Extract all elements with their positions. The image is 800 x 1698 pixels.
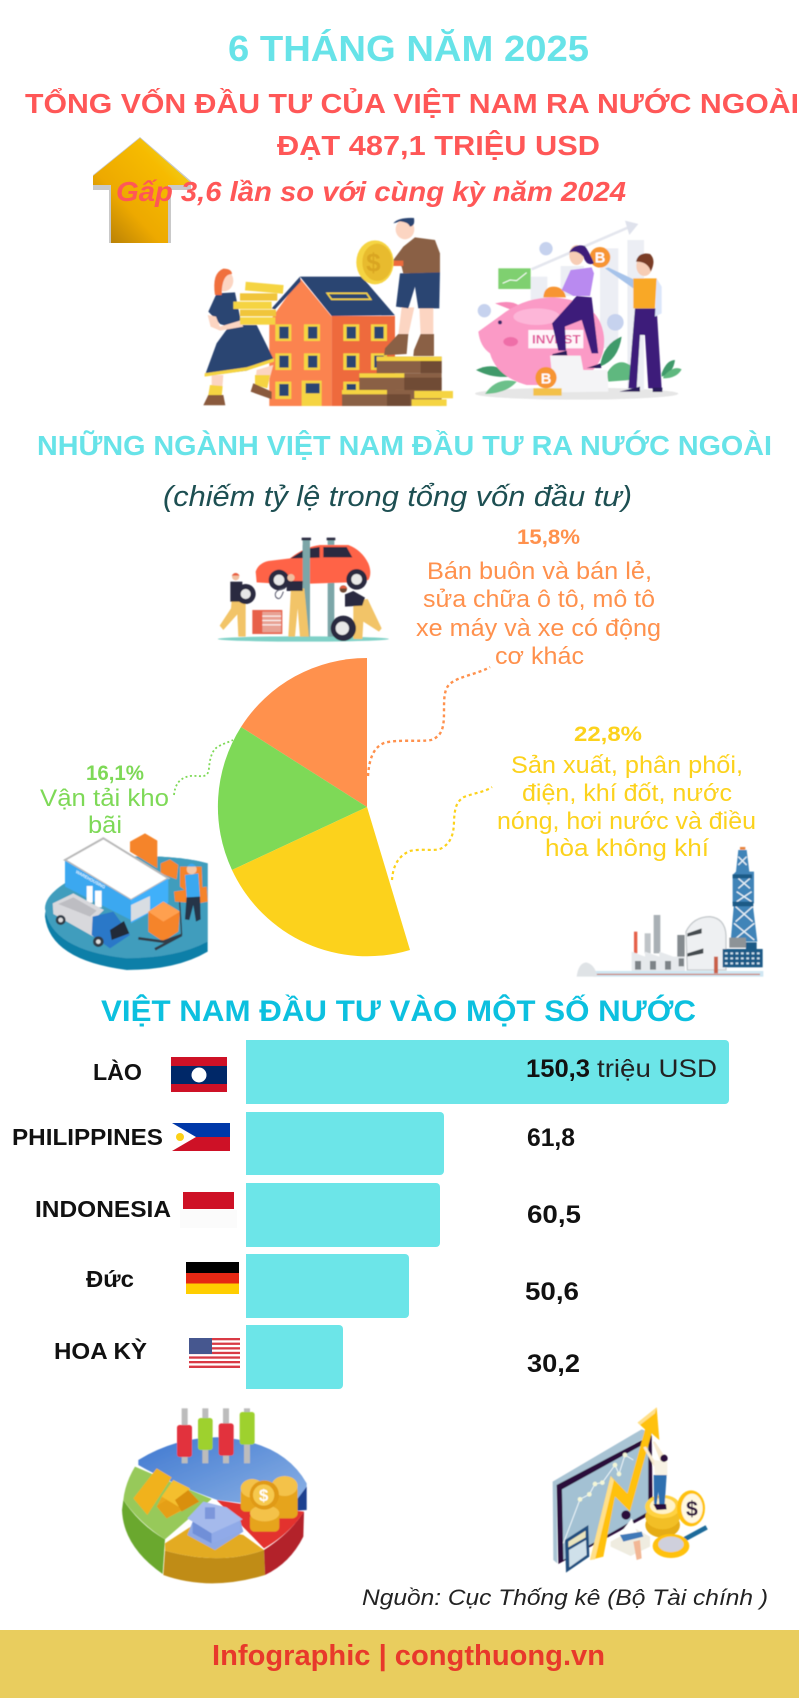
coins: B (595, 251, 605, 267)
car lift posts (302, 538, 335, 637)
magnifier (653, 1527, 707, 1558)
country labels: INDONESIA (35, 1196, 171, 1222)
label: energy sector: điện, khí đốt, nước (522, 780, 732, 807)
headline: total investment (25, 87, 799, 161)
coin stacks (241, 1476, 298, 1532)
truck (53, 893, 130, 948)
red car (256, 545, 370, 590)
bar: United States (246, 1325, 343, 1389)
man holding coin: $ (366, 248, 381, 278)
standing man (643, 1442, 668, 1510)
illustration: car repair (218, 538, 389, 642)
man holding coin (356, 218, 440, 356)
papers and seated woman (611, 1510, 650, 1560)
label: wholesale and retail: xe máy và xe có động (416, 615, 661, 642)
label: wholesale and retail: 15,8% (517, 526, 580, 549)
boxes behind (130, 833, 178, 879)
illustration: warehouse (45, 833, 208, 970)
pig (478, 297, 604, 385)
bar: Philippines (246, 1112, 444, 1175)
country labels: HOA KỲ (54, 1337, 147, 1364)
section heading: sectors: NHỮNG NGÀNH VIỆT NAM ĐẦU TƯ RA NƯỚC NGOÀI (37, 430, 772, 461)
woman carrying coins (203, 269, 284, 405)
label: transport and warehousing: bãi (88, 812, 122, 839)
coins: $ (686, 1497, 698, 1521)
illustration: monitor, rising arrow and coins (553, 1407, 707, 1573)
pig: INVEST (532, 332, 581, 346)
storage tank (686, 917, 726, 973)
yellow slice (163, 1525, 265, 1583)
label: wholesale and retail: Bán buôn và bán lẻ, (427, 558, 652, 585)
worker middle (275, 574, 309, 637)
steps of coins (342, 357, 453, 406)
illustration: oil rig and factory (577, 847, 763, 977)
woman (552, 245, 601, 368)
dotted connector: orange (368, 667, 490, 776)
headline: total investment: TỔNG VỐN ĐẦU TƯ CỦA VIỆT NAM RA NƯỚC NGOÀI (25, 87, 799, 119)
bar: Indonesia (246, 1183, 440, 1247)
factory (632, 915, 685, 971)
dome tank (577, 962, 597, 977)
illustration: piggy bank invest: B (541, 371, 551, 387)
bar: Germany (246, 1254, 409, 1318)
building: WAREHOUSING (75, 869, 107, 890)
calculator (565, 1525, 589, 1573)
bar chart: investment by country (246, 1040, 729, 1389)
green slice (122, 1467, 212, 1574)
flag: United States (189, 1338, 240, 1368)
label: transport and warehousing: 16,1% (86, 762, 144, 785)
subheadline: comparison with 2024: Gấp 3,6 lần so với cùng kỳ năm 2024 (116, 176, 626, 207)
label: energy sector (497, 723, 756, 862)
values: other countries: 50,6 (525, 1278, 579, 1306)
value: Laos (526, 1055, 717, 1083)
coin stacks: $ (259, 1486, 269, 1505)
worker left (220, 573, 256, 637)
flag: Germany (186, 1262, 239, 1294)
section heading: countries: VIỆT NAM ĐẦU TƯ VÀO MỘT SỐ NƯỚC (101, 994, 696, 1028)
section subtitle: (chiếm tỷ lệ trong tổng vốn đầu tư) (163, 481, 632, 513)
country labels: PHILIPPINES (12, 1124, 163, 1150)
platform (45, 856, 208, 970)
value: Laos: 150,3 (526, 1055, 590, 1083)
pedestal (550, 356, 608, 392)
footer text: Infographic | congthuong.vn (212, 1640, 605, 1672)
plants (476, 337, 682, 394)
label: transport and warehousing (40, 762, 169, 839)
values: other countries (525, 1124, 581, 1378)
label: wholesale and retail: sửa chữa ô tô, mô tô (423, 586, 655, 613)
rig tower (723, 847, 763, 967)
illustration: 3D pie with gold, house and coins (122, 1408, 307, 1583)
bar: Laos (246, 1040, 729, 1104)
flag: Philippines (172, 1123, 230, 1151)
worker (174, 864, 208, 922)
big arrow (590, 1407, 659, 1560)
blue house (187, 1502, 243, 1550)
country labels (12, 1058, 171, 1364)
worker right and tire (331, 585, 382, 641)
illustration: house and coins (203, 218, 453, 406)
values: other countries: 30,2 (527, 1350, 580, 1378)
house body (269, 277, 395, 406)
values: other countries: 61,8 (527, 1124, 575, 1152)
label: energy sector: hòa không khí (545, 835, 709, 862)
pie chart (218, 658, 410, 956)
label: wholesale and retail: cơ khác (495, 643, 584, 670)
chart backdrop (498, 221, 644, 390)
red slice (217, 1500, 304, 1575)
coins (478, 242, 624, 331)
country labels: Đức (86, 1266, 134, 1292)
label: energy sector: nóng, hơi nước và điều (497, 808, 756, 835)
blue slice (138, 1437, 307, 1511)
pallet jack (138, 897, 182, 949)
values: other countries: 60,5 (527, 1201, 581, 1229)
label: energy sector: Sản xuất, phân phối, (511, 752, 743, 779)
man (605, 254, 662, 392)
toolbox (252, 610, 282, 634)
coins (645, 1490, 705, 1538)
gold bars (133, 1468, 199, 1518)
label: energy sector: 22,8% (574, 723, 642, 746)
label: transport and warehousing: Vận tải kho (40, 785, 169, 812)
label: wholesale and retail (416, 526, 661, 670)
country labels: LÀO (93, 1058, 142, 1085)
icon: gold up arrow (93, 137, 191, 243)
candlesticks (177, 1408, 255, 1463)
dotted connector: yellow (392, 787, 492, 880)
headline: total investment: ĐẠT 487,1 TRIỆU USD (277, 130, 600, 161)
flag: Indonesia (180, 1192, 237, 1228)
flag: Laos (171, 1057, 227, 1092)
building (65, 838, 168, 923)
monitor (553, 1429, 653, 1564)
title: period: 6 THÁNG NĂM 2025 (228, 28, 589, 69)
source note: Nguồn: Cục Thống kê (Bộ Tài chính ) (362, 1585, 768, 1610)
footer band (0, 1630, 799, 1698)
dotted connector: green (174, 740, 233, 795)
value: Laos: triệu USD (597, 1055, 717, 1083)
illustration: piggy bank invest (475, 221, 682, 400)
